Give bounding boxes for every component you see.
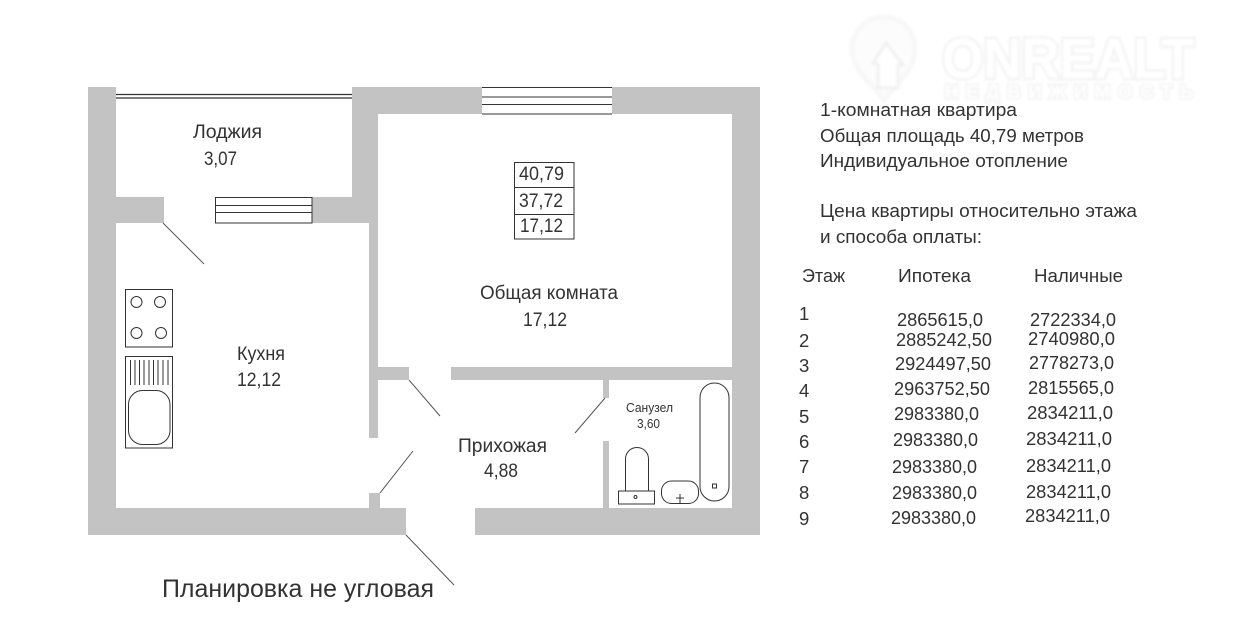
floor 7: 7 [799, 456, 809, 477]
floor 8: 2834211,0 [1026, 481, 1111, 502]
table header: Этаж [802, 265, 846, 286]
area summary box: 37,72 [519, 191, 563, 212]
floor 2 [799, 328, 1115, 351]
room label: hallway: 4,88 [484, 461, 518, 482]
apartment description [820, 99, 1138, 247]
floor 9: 2834211,0 [1025, 505, 1110, 526]
room label: loggia [193, 122, 262, 170]
icon: stove [126, 290, 172, 347]
floor 1: 2722334,0 [1030, 309, 1116, 330]
floor 5: 2834211,0 [1027, 402, 1113, 423]
walls [88, 87, 760, 535]
apartment description: Общая площадь 40,79 метров [820, 125, 1084, 146]
icon: toilet [618, 448, 654, 504]
floor 8: 2983380,0 [892, 482, 977, 503]
room label: kitchen: 12,12 [237, 370, 281, 391]
floor 1: 2865615,0 [897, 309, 983, 330]
floor 5: 2983380,0 [894, 403, 979, 424]
floor 1 [799, 303, 1116, 330]
floor 4: 2963752,50 [894, 378, 990, 399]
room label: hallway: Прихожая [458, 436, 547, 457]
floor 3: 3 [799, 355, 809, 376]
room label: bathroom [626, 400, 673, 431]
room label: hallway [458, 436, 547, 482]
room label: kitchen: Кухня [237, 344, 285, 365]
apartment description: Индивидуальное отопление [820, 150, 1068, 171]
apartment description: Цена квартиры относительно этажа [820, 200, 1138, 221]
floor 7: 2983380,0 [892, 456, 977, 477]
floor 7: 2834211,0 [1026, 455, 1111, 476]
floor 6 [799, 428, 1112, 452]
icon: washbasin [662, 481, 698, 504]
floor 4: 4 [799, 380, 809, 401]
floor 5: 5 [799, 406, 809, 427]
floor 9: 2983380,0 [891, 507, 976, 528]
floor 3 [799, 352, 1114, 376]
icon: bathtub [700, 383, 729, 501]
table header: Ипотека [898, 265, 972, 286]
room label: bathroom: 3,60 [637, 416, 660, 431]
table header [802, 265, 1123, 286]
floor 4: 2815565,0 [1028, 377, 1114, 398]
caption: layout note: Планировка не угловая [162, 575, 434, 603]
watermark: ONREALT logo: НЕДВИЖИМОСТЬ [945, 82, 1193, 102]
room label: loggia: Лоджия [193, 122, 262, 143]
apartment description: 1-комнатная квартира [820, 99, 1018, 120]
floor 5 [799, 402, 1113, 427]
room label: common room: 17,12 [523, 310, 567, 331]
area summary box: 17,12 [520, 216, 563, 237]
floor 2: 2885242,50 [896, 329, 992, 350]
floor 8: 8 [799, 482, 809, 503]
windows [116, 88, 612, 223]
icon: kitchen sink [126, 356, 172, 448]
floor 9: 9 [799, 508, 809, 529]
floor 2: 2 [799, 330, 809, 351]
floor 4 [799, 377, 1114, 401]
price table [799, 265, 1123, 529]
apartment description: и способа оплаты: [820, 226, 982, 247]
floor 1: 1 [799, 303, 809, 324]
floor 6: 2983380,0 [893, 429, 978, 450]
room label: common room [480, 283, 618, 331]
floor 2: 2740980,0 [1028, 328, 1115, 349]
floor 9 [799, 505, 1110, 529]
floor 8 [799, 481, 1111, 503]
door swings [163, 223, 605, 585]
room label: bathroom: Санузел [626, 400, 673, 415]
room label: common room: Общая комната [480, 283, 618, 304]
room label: loggia: 3,07 [204, 149, 237, 170]
area summary box [514, 162, 574, 239]
floor 3: 2778273,0 [1029, 352, 1114, 373]
room label: kitchen [237, 344, 285, 391]
watermark: ONREALT logo: ONREALT [942, 27, 1194, 91]
floor 6: 2834211,0 [1026, 428, 1112, 449]
floor plan [88, 87, 760, 585]
watermark: ONREALT logo [852, 17, 1194, 102]
table header: Наличные [1034, 265, 1123, 286]
floor 7 [799, 455, 1111, 477]
floor 3: 2924497,50 [895, 353, 991, 374]
floor 6: 6 [799, 431, 809, 452]
area summary box: 40,79 [519, 164, 564, 185]
